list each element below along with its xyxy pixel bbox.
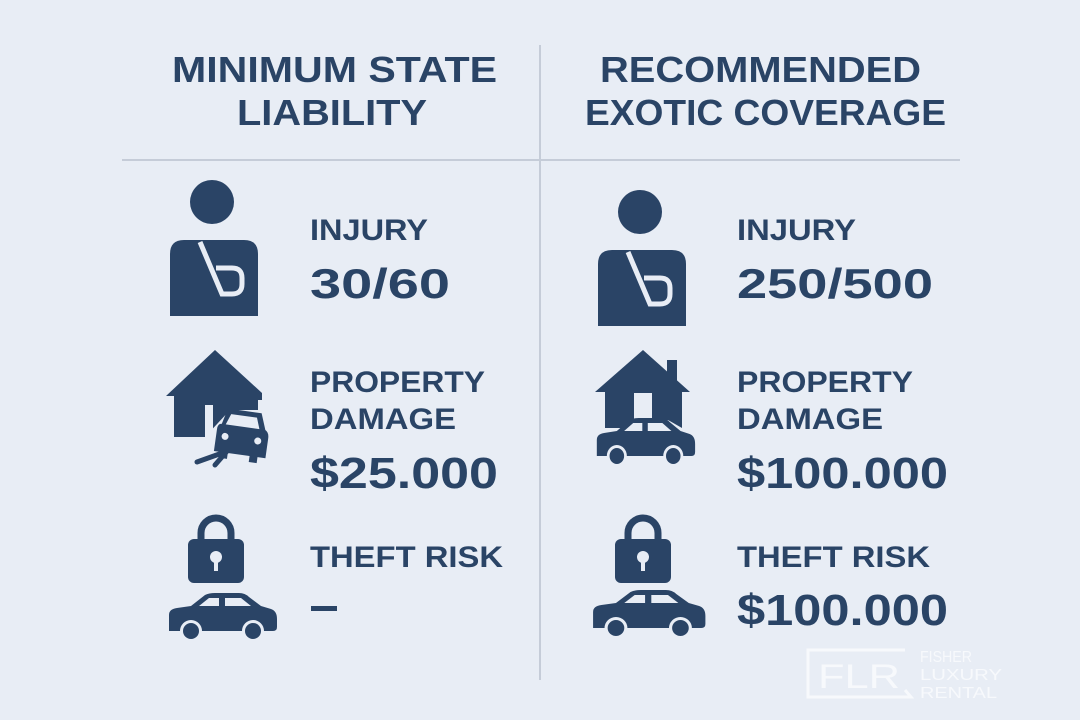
dividers [122,45,960,680]
text: injury left [310,214,450,307]
text: injury right [737,214,933,307]
heading: minimum state liability: MINIMUM STATE [172,49,497,90]
icon: house with crashed car [166,350,272,465]
logo: FLR: FLR [818,658,900,696]
icon: injury left [170,180,258,316]
logo: FLR: LUXURY [920,667,1002,684]
text: injury left: 30/60 [310,260,450,307]
text: property damage right [737,366,948,498]
text: injury left: INJURY [310,214,428,247]
icon: house with car [595,350,695,467]
text: injury right: INJURY [737,214,856,247]
text: property damage right: PROPERTY [737,366,913,399]
text: property damage right: $100.000 [737,449,948,498]
logo: FLR: RENTAL [920,685,997,702]
heading: minimum state liability: LIABILITY [237,92,427,133]
text: property damage right: DAMAGE [737,403,883,436]
text: theft risk right: $100.000 [737,586,948,635]
text: property damage left: PROPERTY [310,366,485,399]
heading: recommended exotic coverage: RECOMMENDED [600,49,921,90]
logo: FLR [808,649,1002,702]
icon: lock and car right [593,518,705,639]
text: property damage left: DAMAGE [310,403,456,436]
text: injury right: 250/500 [737,260,933,307]
heading: recommended exotic coverage: EXOTIC COVERAGE [585,92,946,133]
icon: lock and car left [169,518,277,642]
text: theft risk left: THEFT RISK [310,541,503,574]
text: theft risk left [310,541,503,611]
text: property damage left: $25.000 [310,449,498,498]
logo: FLR: FISHER [920,649,972,666]
text: theft risk right: THEFT RISK [737,541,930,574]
text: property damage left [310,366,498,498]
text: theft risk right [737,541,948,635]
icon: injury right [598,190,686,326]
heading: minimum state liability [172,49,497,133]
heading: recommended exotic coverage [585,49,946,133]
